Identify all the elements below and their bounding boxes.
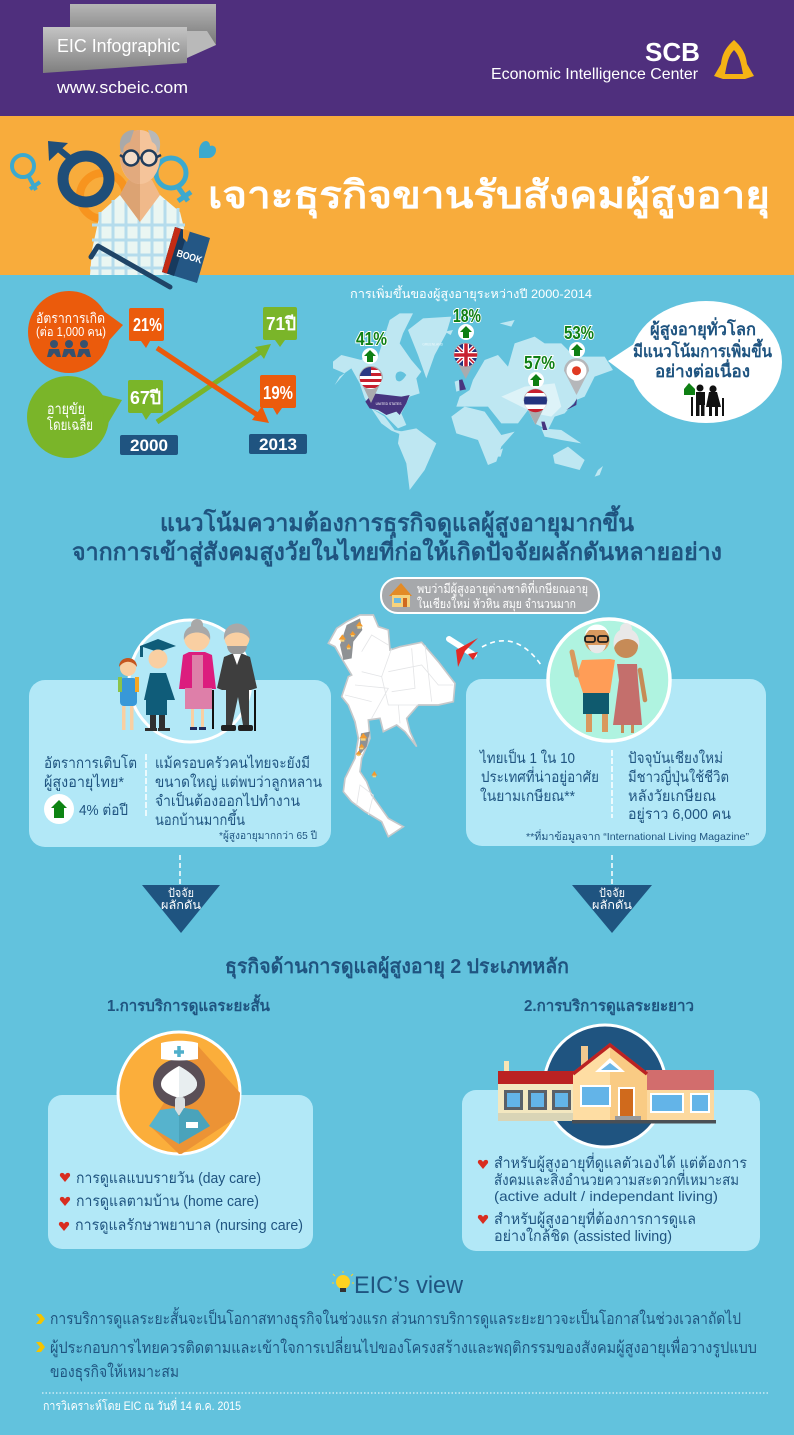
bullet 2: ของธุรกิจให้เหมาะสม (50, 1362, 179, 1382)
divider (42, 1392, 770, 1394)
SCB wordmark (491, 37, 700, 83)
list: care types (59, 1170, 303, 1234)
subheading: short term: 1.การบริการดูแลระยะสั้น (107, 994, 270, 1017)
right text: ปัจจุบันเชียงใหม่ (628, 749, 723, 768)
right text: มีชาวญี่ปุ่นใช้ชีวิต (628, 766, 729, 787)
stat: Thailand 57% (524, 353, 555, 388)
driver arrow left (142, 855, 220, 933)
bullet item 2: การดูแลตามบ้าน (home care) (76, 1193, 259, 1210)
list: living types (478, 1152, 747, 1245)
illustration: elderly couple (572, 623, 645, 733)
stat label: อัตราการเติบโต (44, 754, 137, 772)
callout: global ageing trend: มีแนวโน้มการเพิ่มขึ้น (633, 338, 772, 361)
shirt (90, 195, 187, 275)
heading: trend: แนวโน้มความต้องการธุรกิจดูแลผู้สูงอายุมากขึ้น (160, 504, 635, 539)
man (572, 624, 615, 732)
callout: 71 years: 71ปี (266, 314, 296, 334)
left text (479, 748, 599, 805)
callout: foreign retirees pill: ในเชียงใหม่ หัวหิน สมุย จำนวนมาก (417, 597, 576, 612)
icon: up arrow (44, 794, 74, 824)
illustration: elderly man with gender symbols (12, 130, 216, 287)
callout: 21% (129, 308, 164, 348)
body text (155, 754, 322, 829)
bullet item 1: สังคมและสิ่งอำนวยความสะดวกที่เหมาะสม (494, 1169, 739, 1189)
map title: การเพิ่มขึ้นของผู้สูงอายุระหว่างปี 2000-2014 (350, 285, 592, 302)
circle behind couple (548, 619, 670, 741)
body text: แม้ครอบครัวคนไทยจะยังมี (155, 754, 310, 772)
glasses (120, 150, 161, 166)
title band (0, 116, 794, 275)
icon: book (162, 227, 210, 283)
life expectancy circle: อายุขัย (47, 401, 85, 419)
bullet item 1: การดูแลแบบรายวัน (day care) (76, 1170, 261, 1187)
stat: Japan 53%: 53% (564, 323, 594, 343)
heading: EIC’s view (354, 1272, 464, 1299)
graduate (140, 639, 176, 731)
girl (118, 658, 139, 730)
divider (145, 754, 147, 818)
icons: small houses (339, 622, 377, 776)
pin: UK (453, 343, 478, 379)
callout: foreign retirees pill: พบว่ามีผู้สูงอายุต่างชาติที่เกษียณอายุ (417, 580, 588, 597)
grandfather (217, 624, 257, 731)
panel: long-term care (462, 1025, 760, 1251)
life expectancy circle: โดยเฉลี่ย (47, 414, 93, 434)
year label 2000: 2000 (130, 436, 168, 455)
callout: 19%: 19% (263, 383, 293, 403)
heading: two main types: ธุรกิจด้านการดูแลผู้สูงอายุ 2 ประเภทหลัก (225, 955, 569, 980)
icon: babies (47, 340, 91, 357)
subheading: long term: 2.การบริการดูแลระยะยาว (524, 997, 694, 1017)
callout: 21%: 21% (133, 315, 162, 335)
panel: world map (333, 285, 613, 490)
icon: elderly couple (684, 383, 724, 416)
map land masses: GREENLAND (422, 342, 444, 346)
driver arrow right (572, 855, 652, 933)
SCB wordmark: SCB (645, 37, 700, 67)
pin: USA (359, 366, 383, 403)
map of Thailand (328, 615, 455, 837)
head (120, 130, 160, 184)
panel: EIC's view (36, 1271, 770, 1413)
icon: orange ring (80, 173, 126, 219)
grandmother (179, 619, 216, 730)
icon: SCB logo (714, 40, 754, 79)
pin: Thailand (523, 389, 548, 425)
stat: UK 18% (453, 306, 481, 340)
icon: male symbol (48, 141, 109, 202)
panel: left factor (Thai family) (29, 619, 331, 847)
stat: USA 41%: 41% (356, 329, 387, 349)
illustration: family (118, 619, 257, 731)
EIC Infographic ribbon: EIC Infographic (57, 36, 180, 56)
stat: Thailand 57%: 57% (524, 353, 555, 373)
callout: global ageing trend: ผู้สูงอายุทั่วโลก (650, 317, 756, 341)
heading: trend (72, 504, 722, 567)
stat: UK 18%: 18% (453, 306, 481, 326)
left text: ในยามเกษียณ** (480, 787, 575, 805)
panel: right factor (foreign retirees) (466, 619, 766, 846)
bullet item 2 (478, 1208, 696, 1245)
icon: female symbol right (156, 158, 191, 201)
pin: Japan (564, 358, 589, 395)
bullet 2 (36, 1336, 757, 1382)
body text: นอกบ้านมากขึ้น (155, 809, 245, 829)
icon: nurse (118, 1032, 242, 1155)
footnote: **ที่มาข้อมูลจาก “International Living Magazine” (526, 829, 750, 843)
year label 2013: 2013 (259, 435, 297, 454)
birth rate circle: อัตราการเกิด (36, 310, 105, 326)
driver arrow left: ปัจจัย (168, 886, 194, 900)
chart arrows (157, 344, 271, 423)
callout: 67 years (128, 380, 163, 420)
stat: Japan 53% (564, 323, 594, 358)
footnote: *ผู้สูงอายุมากกว่า 65 ปี (219, 829, 317, 842)
bullet item 1: สำหรับผู้สูงอายุที่ดูแลตัวเองได้ แต่ต้องการ (494, 1152, 747, 1173)
left text: ไทยเป็น 1 ใน 10 (479, 748, 575, 767)
icon: airplane with dashed route (449, 638, 541, 667)
callout: global ageing trend: อย่างต่อเนื่อง (655, 359, 750, 381)
map land masses: UNITED STATES (376, 402, 402, 406)
bullet item 3: การดูแลรักษาพยาบาล (nursing care) (75, 1217, 303, 1234)
divider (611, 750, 613, 818)
icon: house (389, 583, 412, 607)
bullet item 1 (478, 1152, 747, 1204)
driver arrow right: ปัจจัย (599, 886, 625, 900)
EIC Infographic ribbon (43, 4, 216, 73)
panel: short-term care (48, 1032, 313, 1249)
driver arrow left: ผลักดัน (161, 898, 201, 912)
right text (628, 749, 731, 823)
map land masses (333, 313, 613, 490)
right text: อยู่ราว 6,000 คน (628, 806, 731, 823)
neck and chest (120, 180, 160, 222)
year label 2013 (249, 434, 307, 454)
footer note: การวิเคราะห์โดย EIC ณ วันที่ 14 ต.ค. 2015 (43, 1397, 241, 1413)
highlighted provinces (340, 618, 362, 660)
panel: birth rate and life expectancy (27, 291, 307, 458)
SCB wordmark: Economic Intelligence Center (491, 66, 699, 83)
callout: 19% (260, 375, 296, 415)
callout: global ageing trend (608, 301, 782, 423)
icon: heart (199, 141, 216, 158)
year label 2000 (120, 435, 178, 455)
driver arrow right: ผลักดัน (592, 898, 632, 912)
heading: trend: จากการเข้าสู่สังคมสูงวัยในไทยที่ก่อให้เกิดปัจจัยผลักดันหลายอย่าง (72, 534, 722, 567)
icon: female symbol left (12, 155, 40, 190)
woman (613, 623, 645, 733)
body text: ขนาดใหญ่ แต่พบว่าลูกหลาน (155, 773, 322, 791)
header band (0, 0, 794, 116)
stat value: 4% ต่อปี (79, 802, 128, 819)
birth rate circle: (ต่อ 1,000 คน) (36, 325, 106, 339)
right text: หลังวัยเกษียณ (628, 788, 716, 805)
bullet item 1: (active adult / independant living) (494, 1188, 718, 1204)
highlighted countries (365, 379, 577, 430)
icon: light bulb (332, 1271, 354, 1292)
circle behind family (129, 620, 251, 742)
title: เจาะธุรกิจขานรับสังคมผู้สูงอายุ (208, 175, 770, 219)
stat: USA 41% (356, 329, 387, 364)
bullet item 2: อย่างใกล้ชิด (assisted living) (494, 1227, 672, 1245)
panel: left factor (Thai family): ผู้สูงอายุไทย* (44, 773, 124, 792)
left text: ประเทศที่น่าอยู่อาศัย (481, 766, 599, 786)
callout: foreign retirees pill (381, 578, 599, 613)
icon: book: BOOK (175, 248, 204, 267)
birth rate circle (28, 291, 123, 373)
callout: 67 years: 67ปี (130, 388, 161, 408)
body text: จำเป็นต้องออกไปทำงาน (155, 791, 300, 810)
icon: house (498, 1025, 716, 1147)
cane (91, 246, 170, 287)
callout: 71 years (263, 307, 297, 347)
website: www.scbeic.com (56, 78, 188, 97)
life expectancy circle (27, 376, 122, 458)
bullet item 2: สำหรับผู้สูงอายุที่ต้องการการดูแล (494, 1208, 696, 1229)
